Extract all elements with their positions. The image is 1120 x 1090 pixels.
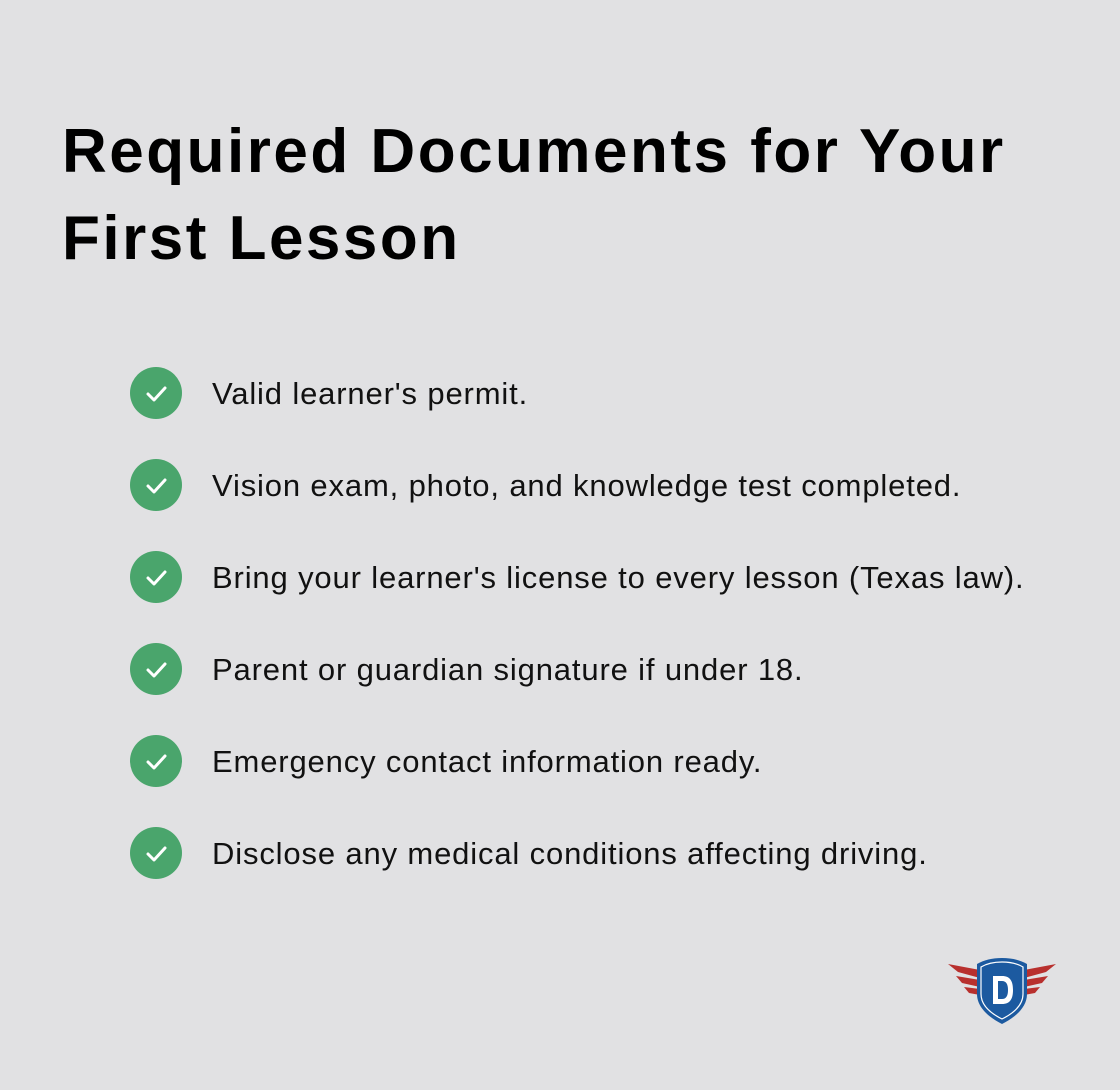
item 3 <box>130 551 1024 603</box>
item 2 <box>130 459 961 511</box>
title: Required Documents for Your <box>62 117 1006 186</box>
item 6: Disclose any medical conditions affecting driving. <box>212 836 928 871</box>
item 1: Valid learner's permit. <box>212 376 528 411</box>
item 2: Vision exam, photo, and knowledge test completed. <box>212 468 961 503</box>
item 5 <box>130 735 762 787</box>
logo <box>948 958 1056 1024</box>
item 6 <box>130 827 928 879</box>
item 3: Bring your learner's license to every lesson (Texas law). <box>212 560 1024 595</box>
title <box>62 117 1006 273</box>
item 4: Parent or guardian signature if under 18. <box>212 652 804 687</box>
item 5: Emergency contact information ready. <box>212 744 762 779</box>
item 4 <box>130 643 804 695</box>
item 1 <box>130 367 528 419</box>
title: First Lesson <box>62 204 461 273</box>
